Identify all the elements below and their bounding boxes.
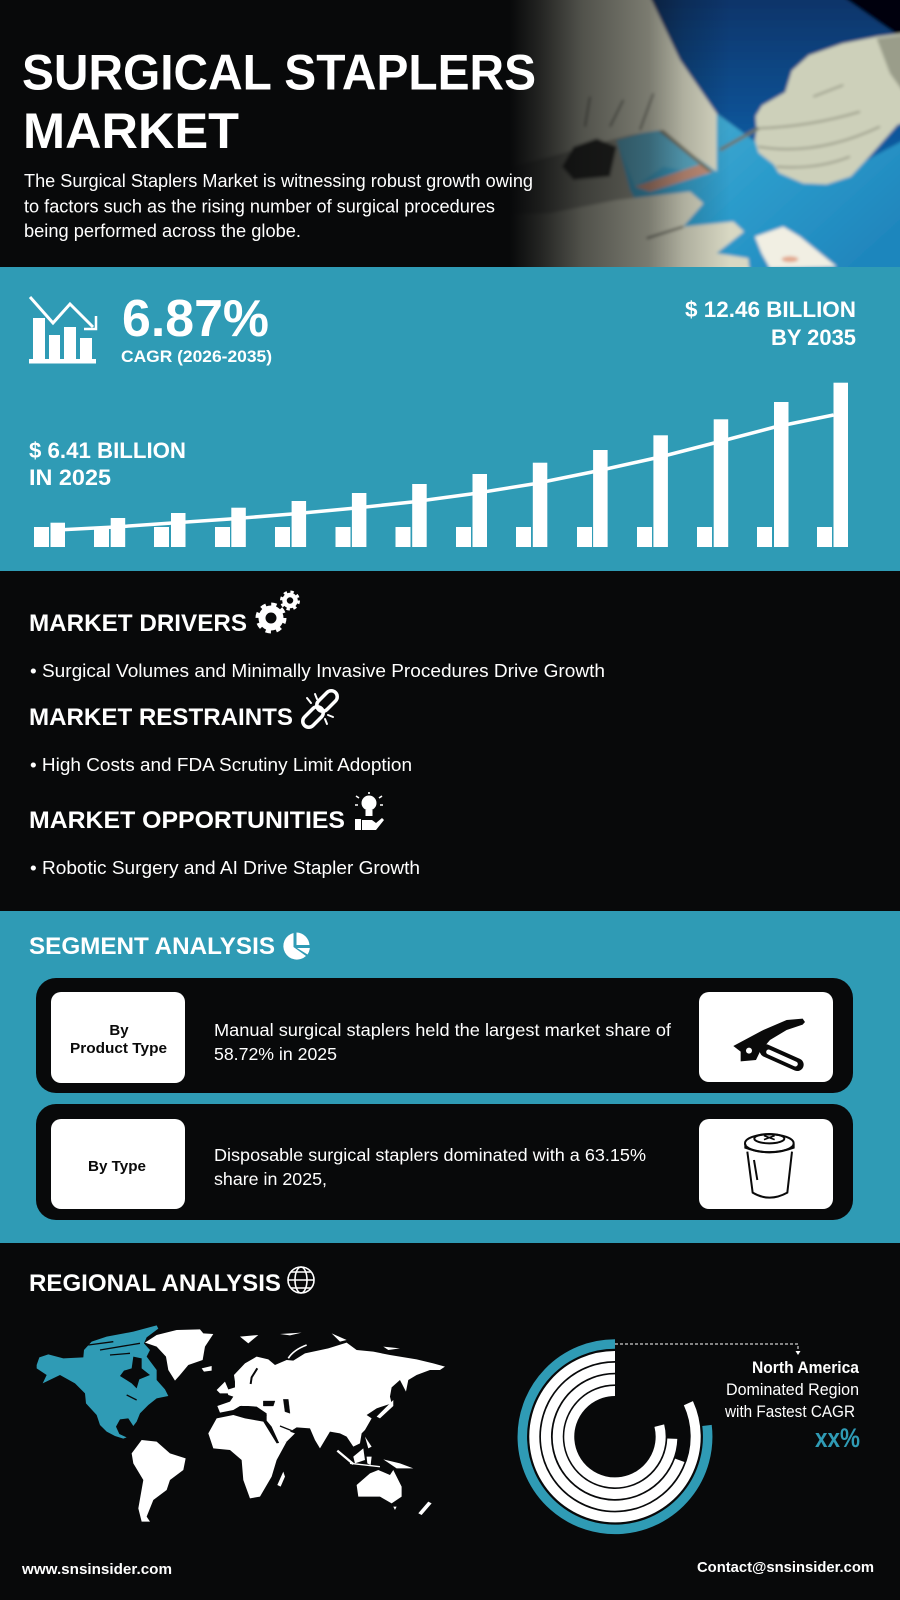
- heading: market drivers: MARKET DRIVERS: [29, 610, 247, 637]
- photo: surgery with gloved hands: [440, 0, 900, 277]
- region callout: with Fastest CAGR: [724, 1403, 855, 1421]
- card text: Manual surgical staplers held the largest market share of: [214, 1020, 671, 1040]
- card text: 58.72% in 2025: [214, 1044, 337, 1064]
- trend line: [57, 415, 834, 530]
- label box: By Type: [88, 1158, 146, 1175]
- world map: [37, 1325, 445, 1522]
- heading: segment analysis: SEGMENT ANALYSIS: [29, 933, 275, 960]
- region: north america: [37, 1325, 168, 1439]
- heading: market opportunities: MARKET OPPORTUNITIES: [29, 807, 345, 834]
- heading: market restraints: MARKET RESTRAINTS: [29, 704, 293, 731]
- 2035 value: BY 2035: [771, 325, 856, 350]
- icon: chart with arrow: [29, 297, 96, 364]
- title: SURGICAL STAPLERS: [22, 44, 536, 100]
- title: [22, 44, 536, 159]
- icon: pie chart: [283, 932, 310, 960]
- intro text: to factors such as the rising number of surgical procedures: [24, 196, 495, 216]
- label box: [51, 992, 185, 1083]
- card text: Disposable surgical staplers dominated with a 63.15%: [214, 1145, 646, 1165]
- title: MARKET: [23, 103, 239, 159]
- other continents: [132, 1329, 445, 1522]
- region callout: xx%: [815, 1423, 860, 1453]
- intro text: being performed across the globe.: [24, 221, 301, 241]
- icon: hand with light bulb: [355, 792, 384, 830]
- icon box: stapler: [699, 992, 833, 1082]
- label box: By: [109, 1022, 129, 1039]
- north america inland water: [88, 1342, 150, 1400]
- arrow: dashed leader: [615, 1344, 800, 1355]
- 2035 value: [685, 297, 856, 350]
- label box: Product Type: [70, 1040, 167, 1057]
- region callout: [724, 1359, 860, 1453]
- card: by product type: [36, 978, 853, 1093]
- region callout: Dominated Region: [726, 1381, 859, 1399]
- icon: globe: [288, 1267, 314, 1293]
- hero panel: [0, 0, 900, 277]
- opportunity text: • Robotic Surgery and AI Drive Stapler Growth: [30, 857, 420, 878]
- contact: Contact@snsinsider.com: [697, 1559, 874, 1576]
- restraint text: • High Costs and FDA Scrutiny Limit Adoption: [30, 754, 412, 775]
- panel: regional analysis: [29, 1267, 860, 1529]
- card text: share in 2025,: [214, 1169, 327, 1189]
- icon: gears: [258, 592, 298, 632]
- icon box: disposable cup: [699, 1119, 833, 1209]
- heading: regional analysis: REGIONAL ANALYSIS: [29, 1270, 281, 1297]
- footer: [21, 1559, 874, 1578]
- panel: market growth: [0, 267, 900, 571]
- card text: [214, 1145, 646, 1189]
- bar chart: [34, 383, 848, 547]
- label box: [51, 1119, 185, 1209]
- 2025 value: IN 2025: [29, 465, 111, 490]
- driver text: • Surgical Volumes and Minimally Invasive Procedures Drive Growth: [30, 660, 605, 681]
- 2035 value: $ 12.46 BILLION: [685, 297, 856, 322]
- CAGR label: CAGR (2026-2035): [121, 348, 272, 366]
- inland seas: [233, 1368, 292, 1443]
- region callout: North America: [752, 1359, 860, 1377]
- panel: market dynamics: [29, 592, 605, 878]
- intro text: The Surgical Staplers Market is witnessing robust growth owing: [24, 171, 533, 191]
- icon: broken link: [300, 688, 340, 730]
- 2025 value: [29, 438, 186, 490]
- CAGR value: 6.87%: [122, 290, 269, 348]
- intro text: [24, 171, 533, 241]
- website: www.snsinsider.com: [21, 1561, 172, 1578]
- card text: [214, 1020, 671, 1064]
- radial chart: [522, 1344, 708, 1529]
- card: by type: [36, 1104, 853, 1220]
- panel: segment analysis: [0, 911, 900, 1243]
- 2025 value: $ 6.41 BILLION: [29, 438, 186, 463]
